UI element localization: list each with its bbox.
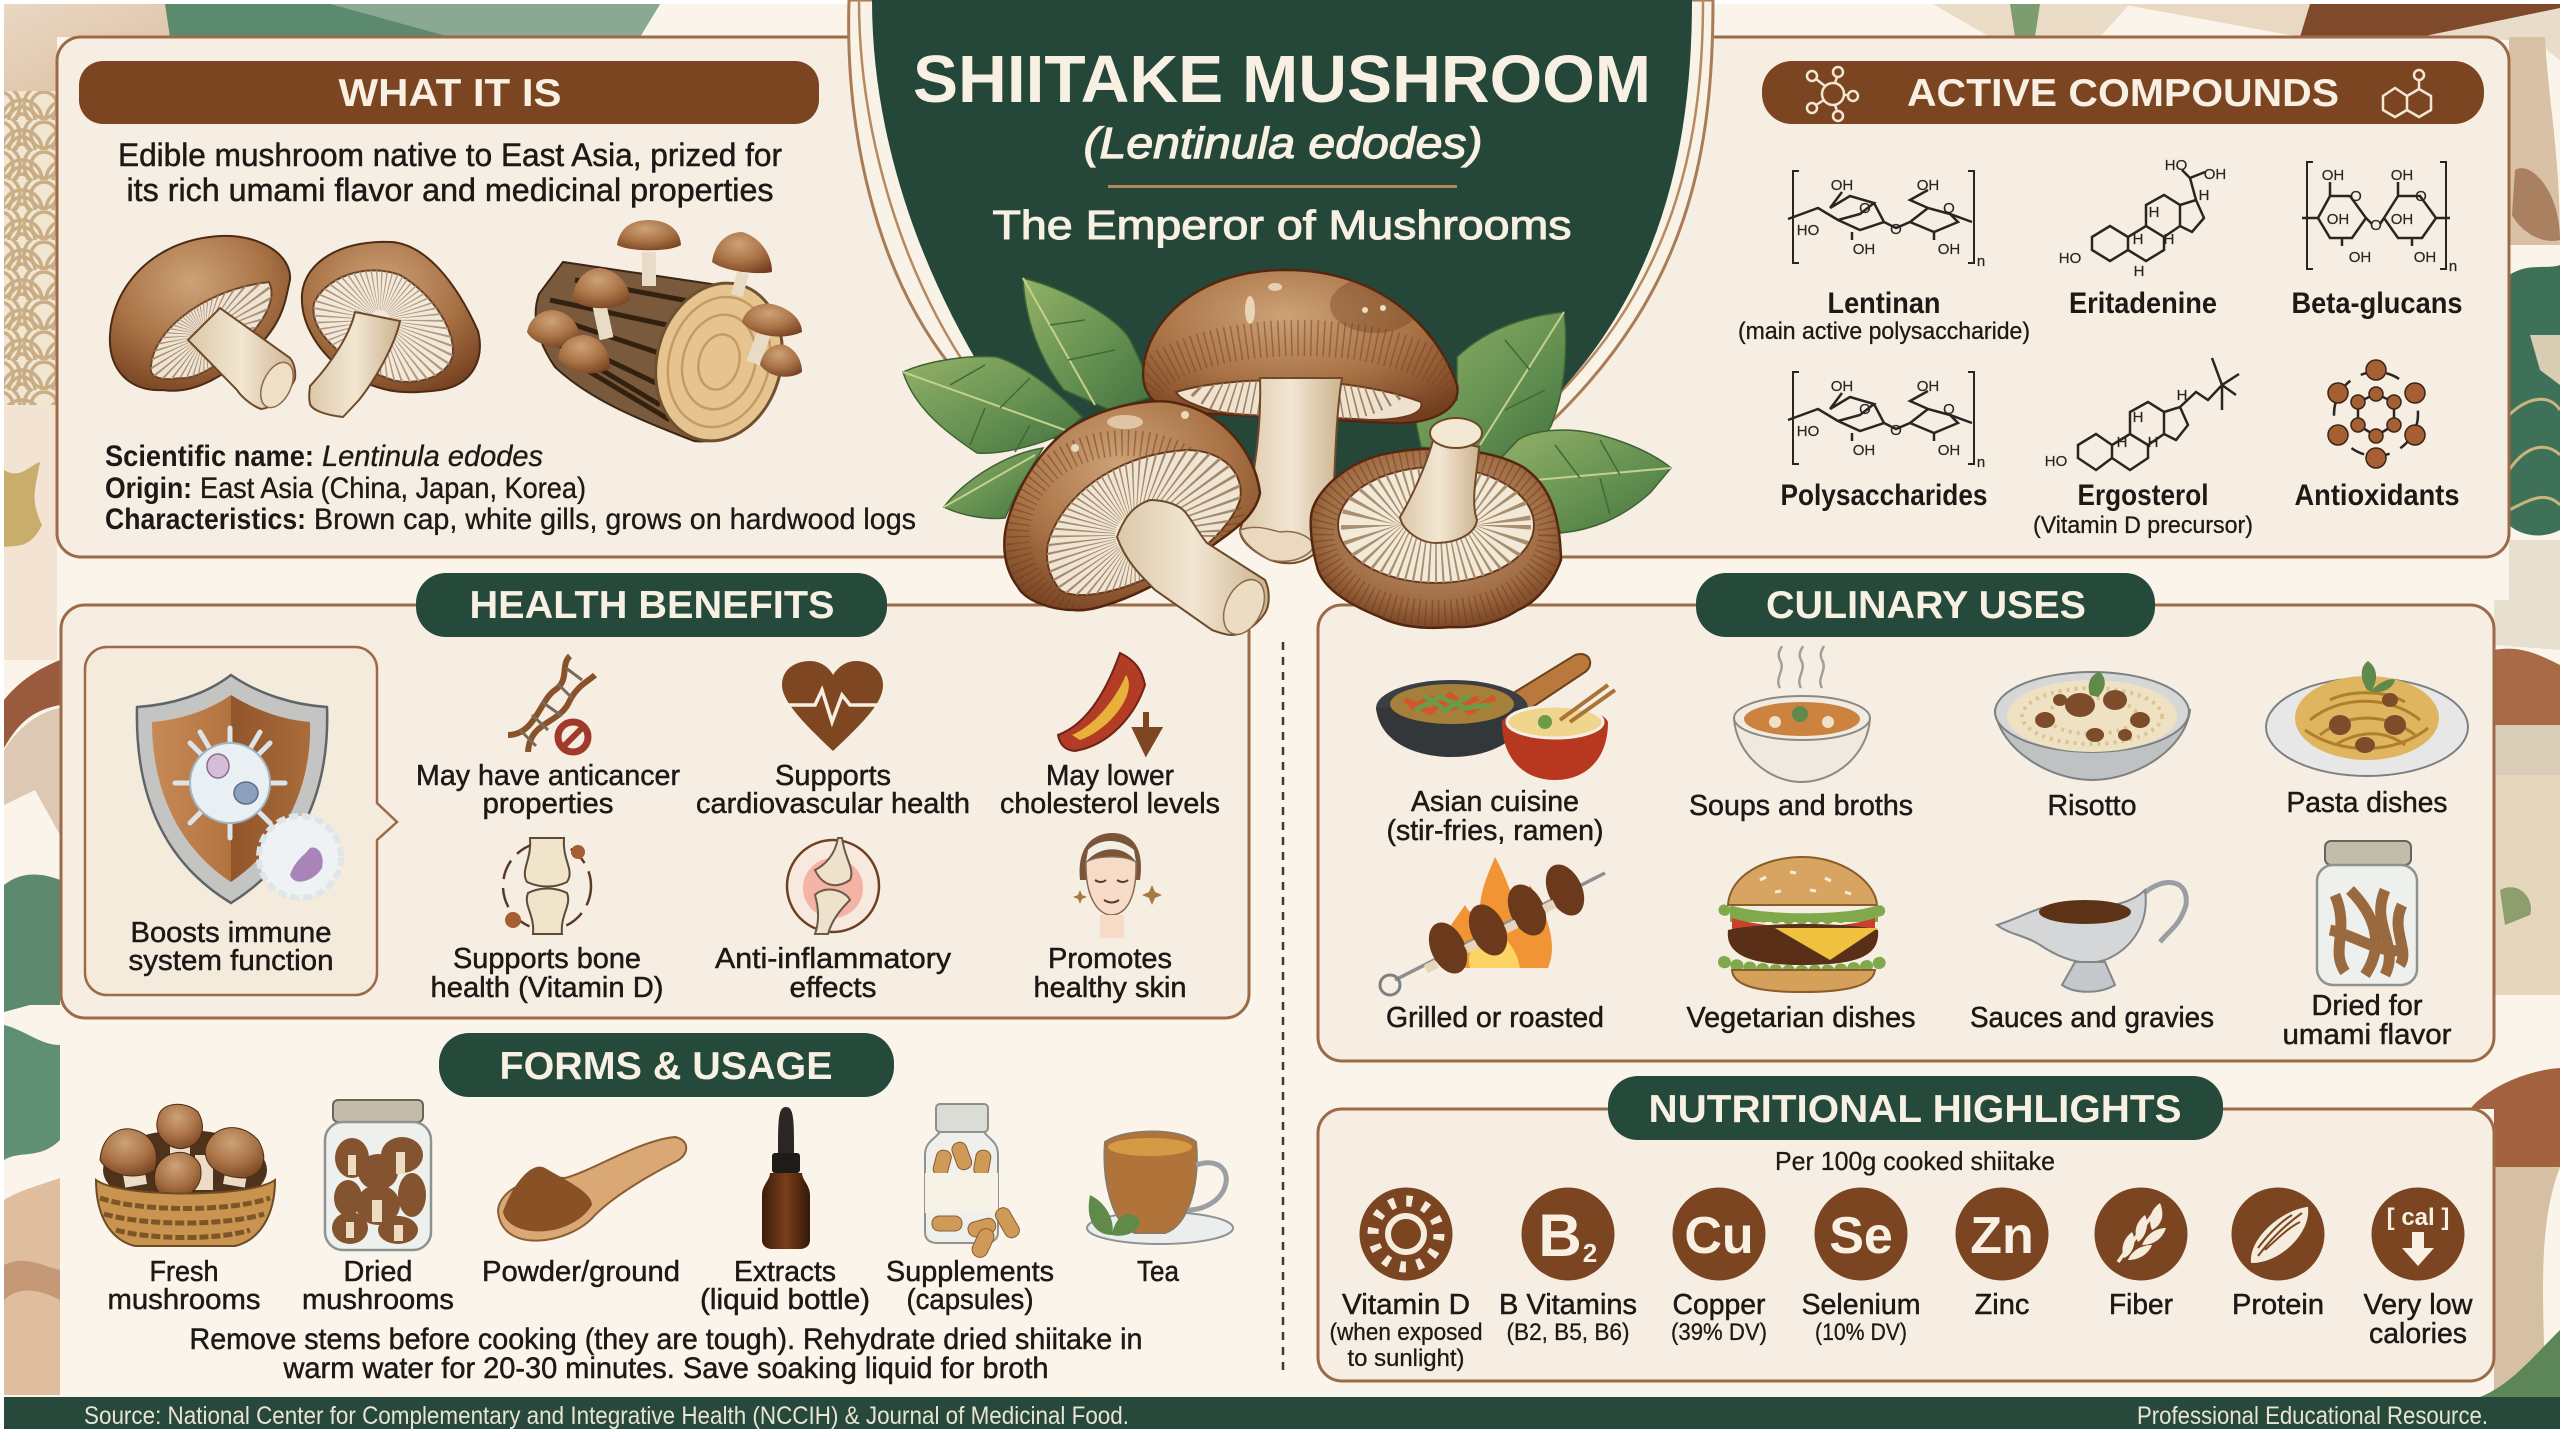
panel: health benefits [61,573,1249,1018]
label: skin [1034,943,1186,1004]
footer [4,1397,2560,1429]
nutrient: zinc: Zn [1970,1207,2034,1265]
heading pill: forms and usage [439,1033,894,1097]
label: soups: Soups and broths [1689,790,1913,822]
heading pill: health benefits: HEALTH BENEFITS [470,584,834,627]
chemical structure: lentinan: HO [1797,222,1819,239]
chemical structure: beta-glucans: OH [2414,249,2436,266]
heading pill: nutritional highlights [1608,1076,2223,1140]
nutrient: selenium: (10% DV) [1815,1319,1907,1346]
label: pasta: Pasta dishes [2286,787,2448,819]
details text: Scientific name: [105,440,314,473]
chemical structure: polysaccharides: OH [1831,378,1853,395]
icon: basket of mushrooms [96,1104,275,1246]
usage tip text [190,1323,1142,1385]
subtitle: The Emperor of Mushrooms [992,202,1572,248]
chemical structure: eritadenine: H [2199,187,2209,204]
icon: supplement bottle [925,1104,1022,1260]
chemical structure: lentinan: O [1943,200,1955,217]
chemical structure: beta-glucans [2302,162,2457,275]
icon: gravy boat [1997,882,2186,992]
chemical structure: lentinan: O [1890,221,1902,238]
label: ergosterol: Ergosterol [2078,479,2208,512]
nutrient: copper: Cu [1684,1207,1754,1265]
label: cardiovascular: cardiovascular health [696,788,970,820]
label: anti-inflammatory: effects [790,972,876,1004]
label: extracts: Extracts [734,1256,836,1288]
icon: artery and down arrow [1058,653,1158,751]
label: supplements: (capsules) [906,1284,1034,1316]
icon: wok and ramen bowl [1376,654,1615,780]
nutrient: copper: (39% DV) [1671,1319,1767,1346]
nutrient: selenium [1802,1188,1920,1346]
chemical structure: polysaccharides: OH [1853,442,1875,459]
label: fresh [108,1256,260,1316]
chemical structure: lentinan: O [1859,200,1871,217]
label: risotto: Risotto [2048,790,2136,822]
nutrient: calories: calories [2369,1318,2467,1350]
icon: mushroom gill view [302,242,480,417]
label: cholesterol: May lower [1046,760,1174,792]
nutrient: B vitamins [1499,1188,1637,1346]
label: bone: Supports bone [453,943,641,975]
title arch [849,0,1713,500]
label: lentinan: Lentinan [1828,287,1940,320]
chemical structure: beta-glucans: OH [2322,167,2344,184]
chemical structure: beta-glucans: OH [2327,211,2349,228]
label: anti-inflammatory: Anti-inflammatory [715,943,952,975]
label: dried umami: Dried for [2312,990,2423,1022]
label: asian cuisine [1386,786,1604,847]
nutrient: zinc [1956,1188,2048,1321]
nutrient: fiber [2094,1188,2188,1321]
icon: soup bowl [1734,646,1870,782]
label: cardiovascular: Supports [775,760,891,792]
label: antioxidants: Antioxidants [2294,479,2460,512]
details text: Origin: [105,472,192,505]
label: anticancer: May have anticancer [416,760,680,792]
chemical structure: lentinan [1788,171,1985,270]
label: dried umami: umami flavor [2282,1019,2452,1051]
icon: mushroom side view [110,236,300,413]
chemical structure: eritadenine: OH [2204,166,2226,183]
details text: Brown cap, white gills, grows on hardwood logs [314,503,916,536]
nutrient: zinc: Zinc [1974,1289,2030,1321]
label: lentinan [1738,287,2030,345]
heading pill: culinary uses [1696,573,2155,637]
icon: burger [1724,857,1882,992]
label: lentinan: (main active polysaccharide) [1738,318,2030,345]
label: anticancer: properties [482,788,614,820]
nutrient: copper: Copper [1672,1289,1766,1321]
details text: Characteristics: [105,503,306,536]
chemical structure: beta-glucans: OH [2391,167,2413,184]
chemical structure: polysaccharides: HO [1797,423,1819,440]
nutrient: vitamin D: to sunlight) [1348,1345,1464,1372]
label: fresh: mushrooms [108,1284,260,1316]
label: sauces: Sauces and gravies [1970,1002,2214,1034]
chemical structure: ergosterol [2045,358,2239,470]
usage tip text: Remove stems before cooking (they are tough). Rehydrate dried shiitake in [190,1323,1142,1356]
usage tip text: warm water for 20-30 minutes. Save soaking liquid for broth [283,1352,1048,1385]
panel: nutritional highlights [1318,1076,2494,1381]
chemical structure: polysaccharides: OH [1917,378,1939,395]
scientific name: (Lentinula edodes) [1084,119,1482,168]
label: anti-inflammatory [715,943,952,1004]
callout: immune box [85,647,397,995]
chemical structure: eritadenine: HO [2165,157,2187,174]
chemical structure: ergosterol: HO [2045,453,2067,470]
chemical structure: eritadenine: HO [2059,250,2081,267]
label: anticancer [416,760,680,820]
icon: shield with immune cells [137,675,341,903]
label: asian cuisine: (stir-fries, ramen) [1386,815,1604,847]
label: cardiovascular [696,760,970,820]
heading pill: active compounds: ACTIVE COMPOUNDS [1907,72,2339,115]
label: extracts: (liquid bottle) [700,1284,870,1316]
heading pill: culinary uses: CULINARY USES [1766,584,2086,627]
chemical structure: beta-glucans: O [2370,217,2382,234]
heading pill: what it is: WHAT IT IS [338,72,562,115]
chemical structure: eritadenine: H [2149,204,2159,221]
icon: log with mushrooms [527,220,802,455]
chemical structure: beta-glucans: OH [2391,211,2413,228]
heading pill: nutritional highlights: NUTRITIONAL HIGHLIGHTS [1648,1088,2182,1131]
chemical structure: polysaccharides: O [1943,401,1955,418]
label: dried: mushrooms [302,1284,454,1316]
section: forms and usage [96,1033,1233,1385]
icon: inflamed joint [787,838,879,934]
label: skin: Promotes [1048,943,1172,975]
chemical structure: polysaccharides: n [1977,454,1985,471]
icon: DNA with prohibition sign [508,656,595,752]
heading pill: health benefits [416,573,887,637]
label: ergosterol [2033,479,2253,539]
icon: leaves [903,278,1671,533]
chemical structure: lentinan: OH [1938,241,1960,258]
label: dried: Dried [344,1256,412,1288]
chemical structure: eritadenine [2059,157,2226,280]
panel: active compounds [1500,37,2509,557]
serving note: Per 100g cooked shiitake [1775,1146,2055,1176]
icon: pasta plate [2266,661,2468,776]
label: fresh: Fresh [150,1256,218,1288]
nutrient: copper [1671,1188,1767,1346]
label: immune: system function [128,945,334,977]
chemical structure: eritadenine: H [2164,231,2174,248]
heading pill: forms and usage: FORMS & USAGE [500,1045,832,1088]
description text: Edible mushroom native to East Asia, prized for [118,137,782,173]
chemical structure: lentinan: OH [1917,177,1939,194]
chemical structure: eritadenine: H [2134,263,2144,280]
icon: jar of dried slices [2317,841,2417,985]
label: skin: healthy skin [1034,972,1186,1004]
icon: dropper bottle [762,1107,810,1249]
nutrient: B vitamins: 2 [1583,1238,1597,1268]
chemical structure: beta-glucans: O [2415,188,2427,205]
nutrient: protein [2232,1188,2324,1321]
nutrient: selenium: Se [1829,1207,1893,1265]
label: supplements: Supplements [886,1256,1054,1288]
label: supplements [886,1256,1054,1316]
heading pill: active compounds [1762,61,2484,124]
chemical structure: ergosterol: H [2148,434,2158,451]
label: immune [128,917,334,977]
chemical structure: lentinan: OH [1831,177,1853,194]
panel: what it is [57,37,1057,557]
label: bone: health (Vitamin D) [430,972,664,1004]
chemical structure: polysaccharides [1788,372,1985,471]
icon: tea cup [1087,1132,1233,1244]
chemical structure: beta-glucans: O [2350,188,2362,205]
label: eritadenine: Eritadenine [2069,287,2217,320]
panel: culinary uses [1318,573,2494,1061]
chemical structure: beta-glucans: OH [2349,249,2371,266]
nutrient: B vitamins: B [1538,1202,1582,1269]
chemical structure: ergosterol: H [2133,409,2143,426]
nutrient: B vitamins: B Vitamins [1499,1289,1637,1321]
nutrient: calories: [ cal ] [2387,1204,2449,1231]
nutrient: protein: Protein [2232,1289,2324,1321]
label: powder: Powder/ground [482,1256,680,1288]
nutrient: selenium: Selenium [1802,1289,1920,1321]
icon: skewer with flames [1380,857,1605,995]
chemical structure: lentinan: OH [1853,241,1875,258]
nutrient: vitamin D [1330,1188,1482,1372]
label: dried [302,1256,454,1316]
label: immune: Boosts immune [130,917,332,949]
label: asian cuisine: Asian cuisine [1411,786,1579,818]
chemical structure: polysaccharides: O [1859,401,1871,418]
details text: Lentinula edodes [322,440,543,473]
icon: face [1073,833,1162,938]
label: cholesterol: cholesterol levels [1000,788,1220,820]
label: beta-glucans: Beta-glucans [2292,287,2462,320]
chemical structure: polysaccharides: O [1890,422,1902,439]
label: extracts [700,1256,870,1316]
chemical structure: ergosterol: H [2177,387,2187,404]
heading pill: what it is [79,61,819,124]
label: dried umami [2282,990,2452,1051]
label: tea: Tea [1137,1256,1180,1288]
icon: antioxidants [2328,360,2425,468]
icon: jar of dried mushrooms [325,1100,431,1250]
chemical structure: ergosterol: H [2117,434,2127,451]
label: ergosterol: (Vitamin D precursor) [2033,512,2253,539]
main title: SHIITAKE MUSHROOM [913,42,1651,117]
nutrient: vitamin D: Vitamin D [1342,1289,1470,1321]
nutrient: vitamin D: (when exposed [1330,1319,1482,1346]
details text: East Asia (China, Japan, Korea) [200,472,586,505]
icon: heart [782,661,883,751]
label: bone [430,943,664,1004]
chemical structure: eritadenine: H [2133,231,2143,248]
nutrient: calories [2364,1188,2474,1350]
chemical structure: beta-glucans: n [2449,258,2457,275]
label: cholesterol [1000,760,1220,820]
label: grilled: Grilled or roasted [1386,1002,1604,1034]
nutrient: calories: Very low [2364,1289,2474,1321]
hero illustration: mushrooms and leaves [903,270,1671,641]
icon: risotto [1995,672,2190,780]
nutrient: B vitamins: (B2, B5, B6) [1506,1319,1630,1346]
chemical structure: lentinan: n [1977,253,1985,270]
icon: center standing mushroom [1140,270,1460,563]
icon: spoon with powder [498,1137,686,1241]
description text: its rich umami flavor and medicinal properties [126,172,774,208]
icon: left mushroom [1004,401,1273,641]
icon: right mushroom [1311,418,1561,628]
label: polysaccharides: Polysaccharides [1780,479,1988,512]
label: vegetarian: Vegetarian dishes [1686,1002,1916,1034]
description text [118,137,782,208]
icon: bone joint [503,838,591,934]
nutrient: fiber: Fiber [2109,1289,2173,1321]
chemical structure: polysaccharides: OH [1938,442,1960,459]
details text [105,440,916,536]
